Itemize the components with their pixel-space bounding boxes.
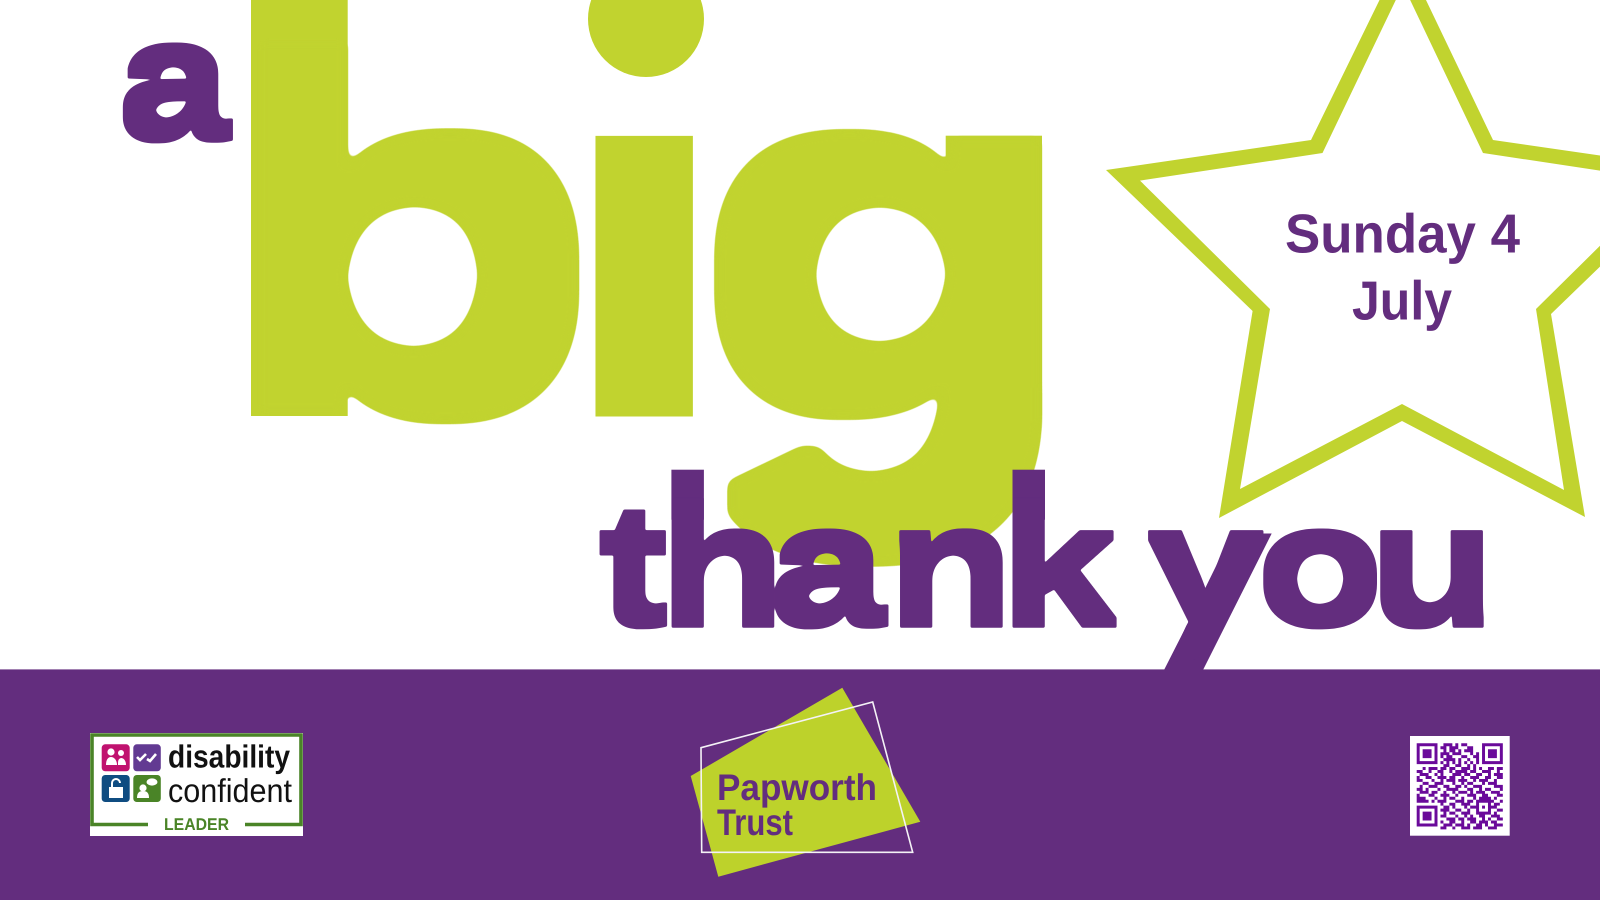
stem of b bbox=[251, 0, 348, 416]
disability confident leader badge: confident bbox=[168, 772, 292, 809]
words: thank you bbox=[599, 473, 1495, 659]
date text: July bbox=[1352, 269, 1452, 331]
letter g bbox=[714, 128, 1043, 567]
qr code bbox=[1410, 736, 1510, 836]
heading: thank you bbox=[599, 470, 1495, 672]
papworth trust logo bbox=[691, 688, 920, 877]
disability confident leader badge bbox=[90, 733, 303, 836]
tail of y bbox=[1163, 534, 1272, 672]
heading: big bbox=[211, 0, 1085, 556]
ascender of k bbox=[1012, 470, 1045, 520]
dot of i bbox=[588, 0, 704, 77]
stem of g bbox=[946, 136, 1042, 416]
logo wordmark: Papworth bbox=[717, 767, 877, 808]
icon: ticks bbox=[133, 744, 161, 771]
star outline bbox=[1106, 0, 1600, 518]
icon: padlock bbox=[102, 775, 130, 802]
ascender of h bbox=[671, 470, 704, 520]
icon: people bbox=[102, 744, 130, 771]
disability confident leader badge: LEADER bbox=[164, 815, 229, 834]
date text bbox=[1285, 203, 1520, 331]
icon: speech bubble bbox=[133, 775, 161, 802]
date text: Sunday 4 bbox=[1285, 203, 1520, 265]
footer band bbox=[0, 669, 1600, 900]
papworth trust logo: Trust bbox=[717, 802, 793, 843]
badge wordmark: disability bbox=[168, 738, 290, 774]
